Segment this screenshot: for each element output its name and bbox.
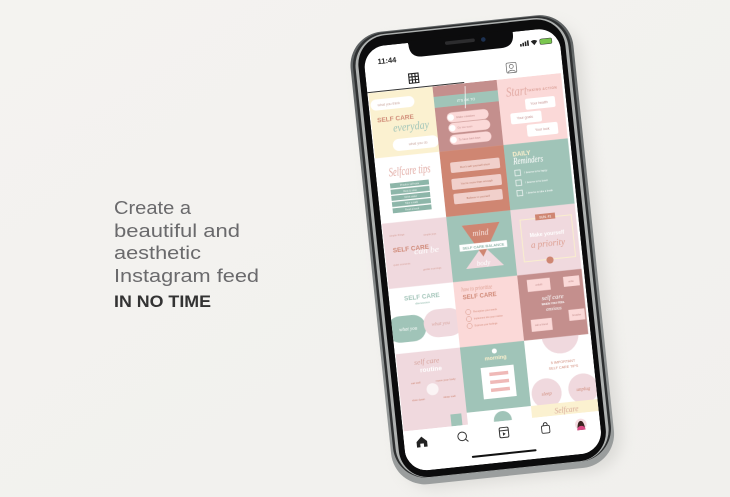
nav icon: reels <box>499 427 509 438</box>
post: selfcare tips: Practice self-care <box>400 182 420 187</box>
phone shadow <box>357 21 625 492</box>
post: it's ok to <box>432 80 504 152</box>
post: self care balance: mind <box>472 227 490 238</box>
home indicator <box>472 449 537 458</box>
post: how to prioritize self care: how to prioritize <box>461 284 493 294</box>
post: self care can be <box>382 217 453 289</box>
post: partial row six right: Selfcare <box>554 404 579 416</box>
headline text: IN NO TIME <box>114 293 211 311</box>
tab icon: grid <box>409 73 419 83</box>
headline text <box>114 197 259 311</box>
post: daily reminders: I deserve to take a break <box>526 189 554 195</box>
post: start taking action: Your health <box>530 100 548 106</box>
post: terracotta affirmations <box>439 145 511 217</box>
post: how to prioritize self care: SELF CARE <box>462 292 497 302</box>
post: daily reminders <box>503 138 575 210</box>
post: daily reminders: DAILY <box>512 150 532 159</box>
post: make yourself a priority: SUN. #1 <box>539 214 552 220</box>
post: selfcare tips: Rest & relax <box>403 188 418 193</box>
post: start taking action: TAKING ACTION <box>527 86 558 93</box>
active tab underline <box>367 82 464 93</box>
nav icon: search <box>457 431 468 442</box>
post: partial row six left <box>403 413 468 433</box>
post: self care can be: gentle mornings <box>423 266 442 272</box>
post: self care discussion: what you <box>399 326 418 333</box>
post: it's ok to: Make mistakes <box>456 113 476 119</box>
post: self care discussion: discussion <box>415 300 430 306</box>
post: 5 important self care tips: SELF CARE TIPS <box>549 364 579 371</box>
post: selfcare tips: Read a book <box>405 207 420 212</box>
post: 5 important self care tips: 5 IMPORTANT <box>551 359 576 365</box>
post: self care when you feel: call a friend <box>535 322 549 327</box>
post: self care everyday <box>368 87 440 159</box>
post: self care when you feel: unfold <box>535 282 543 287</box>
post: self care routine: sleep well <box>443 394 456 399</box>
post: daily reminders: I deserve to be happy <box>524 169 548 174</box>
post: self care can be: simple things <box>389 232 405 238</box>
nav icon: profile avatar <box>575 418 587 430</box>
post: self care routine: routine <box>420 365 443 374</box>
post: self care when you feel: breathe <box>572 312 582 317</box>
post: self care can be: can be <box>414 245 440 256</box>
post: start taking action: Your look <box>535 127 550 132</box>
post: it's ok to: To have bad days <box>458 135 481 142</box>
headline text: Instagram feed <box>114 265 259 286</box>
post: morning: morning <box>484 354 507 363</box>
phone body <box>347 12 617 488</box>
post: how to prioritize self care: Implement into your routine <box>474 314 504 320</box>
post: 5 important self care tips: unplug <box>576 387 591 393</box>
post: self care balance <box>446 210 517 282</box>
post: self care when you feel <box>517 269 588 341</box>
status icons <box>520 38 552 47</box>
post: daily reminders: I deserve to be loved <box>525 179 548 184</box>
post: how to prioritize self care: Express your feelings <box>475 322 498 327</box>
post: self care when you feel: write <box>568 279 575 283</box>
phone notch <box>407 30 514 58</box>
headline text: Create a <box>114 197 192 218</box>
camera <box>481 37 486 42</box>
post: start taking action: Start <box>505 84 529 101</box>
post: it's ok to: IT'S OK TO <box>457 97 476 103</box>
post: self care routine: slow down <box>412 397 426 402</box>
post: selfcare tips: Take a walk <box>405 201 419 205</box>
post: make yourself a priority: a priority <box>530 237 566 250</box>
post: partial row six right <box>531 399 599 420</box>
post: 5 important self care tips: sleep <box>541 392 553 398</box>
post: self care routine: self care <box>414 355 440 367</box>
post: make yourself a priority <box>510 204 582 276</box>
post: self care can be: quiet moments <box>393 261 411 267</box>
post: self care can be: SELF CARE <box>393 244 430 255</box>
post: start taking action <box>497 73 568 145</box>
headline text: beautiful and <box>114 220 240 241</box>
bottom tab bar <box>403 411 603 472</box>
post: daily reminders: Reminders <box>512 153 544 167</box>
post: how to prioritize self care <box>453 276 524 348</box>
post: self care discussion <box>389 282 458 343</box>
tab icon: tagged <box>506 62 517 73</box>
headline text: aesthetic <box>114 242 201 263</box>
post: selfcare tips: Selfcare tips <box>388 160 431 180</box>
nav icon: shop <box>541 422 550 433</box>
post: start taking action: Your goals <box>517 115 534 120</box>
phone screen <box>358 27 605 473</box>
nav icon: home <box>416 436 428 448</box>
post: it's ok to: Go too soon <box>457 124 473 130</box>
phone mockup <box>347 11 625 493</box>
post: terracotta affirmations: Don't sell yourself short <box>460 162 490 169</box>
post: how to prioritize self care: Recognize your needs <box>473 308 498 314</box>
post: 5 important self care tips <box>524 334 598 406</box>
post: terracotta affirmations: Believe in yourself <box>466 194 490 200</box>
post: partial row six middle <box>466 406 531 424</box>
post: self care everyday: what you do <box>409 140 428 146</box>
post: self care everyday: everyday <box>392 117 430 135</box>
post: selfcare tips: Drink water <box>404 195 417 199</box>
post: make yourself a priority: Make yourself <box>530 230 565 239</box>
post: self care balance: body <box>477 258 492 268</box>
speaker <box>445 38 475 45</box>
post: selfcare tips <box>375 152 446 224</box>
post: morning <box>460 341 531 413</box>
post: self care can be: simple joys <box>423 231 437 237</box>
status time: 11:44 <box>377 55 398 66</box>
post: self care routine: move your body <box>436 377 456 383</box>
post: self care when you feel: WHEN YOU FEEL <box>541 300 565 306</box>
post: self care when you feel: self care <box>541 293 564 302</box>
post: self care balance: SELF CARE BALANCE <box>462 241 505 251</box>
post: self care routine <box>396 347 467 420</box>
post: self care discussion: SELF CARE <box>404 292 440 303</box>
post: self care discussion: what you <box>432 321 451 328</box>
post grid <box>362 73 602 440</box>
post: self care routine: eat well <box>411 380 421 385</box>
post: self care when you feel: anxious <box>546 306 562 313</box>
post: self care everyday: what you think <box>377 101 400 107</box>
post: terracotta affirmations: You're more than enough <box>460 178 493 186</box>
post: self care everyday: SELF CARE <box>377 114 415 124</box>
